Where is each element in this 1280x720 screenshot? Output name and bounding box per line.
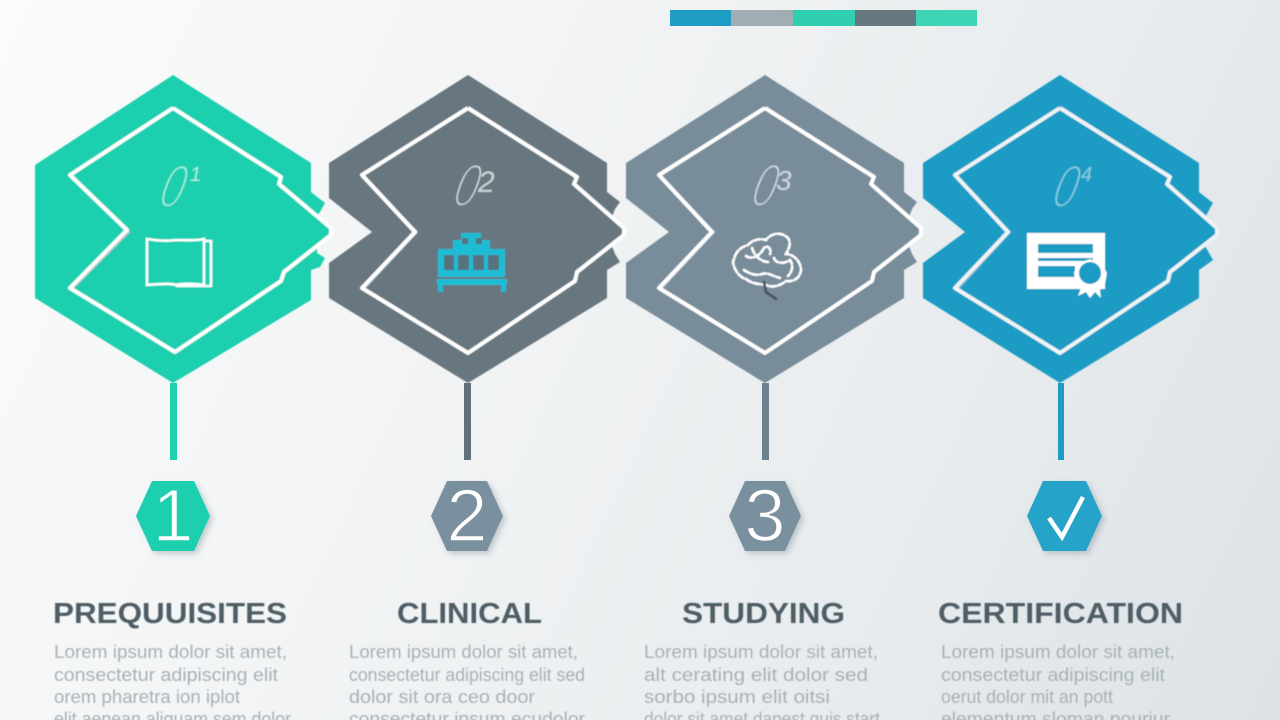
text block: clinical description — [349, 642, 585, 720]
badge: number 1 — [136, 474, 210, 557]
badge: number 2 — [431, 474, 503, 557]
badge: number 3: 3 — [744, 474, 786, 557]
badge: number 3 — [729, 474, 801, 557]
connector stem 1 — [170, 383, 177, 460]
icon: brain — [733, 234, 801, 299]
connector stem 3 — [762, 383, 769, 460]
text block: clinical description: Lorem ipsum dolor sit amet, — [349, 642, 578, 662]
text block: prerequisites description: Lorem ipsum dolor sit amet, — [54, 642, 287, 662]
step number 03: 0 — [746, 153, 786, 220]
connector stem 2 — [464, 383, 471, 460]
panel: step 2 hexagon — [329, 75, 625, 383]
panel: step 3 hexagon — [626, 75, 922, 383]
text block: clinical description: consectetur adipiscing elit sed — [349, 665, 585, 685]
heading: prerequisites: PREQUUISITES — [53, 598, 287, 630]
top colour bar — [670, 10, 977, 26]
step number 01: 0 — [154, 154, 194, 221]
panel: step 4 hexagon — [923, 75, 1218, 383]
icon: hospital bed — [437, 233, 507, 292]
text block: prerequisites description: consectetur adipiscing elit — [54, 665, 278, 685]
text block: certification description: Lorem ipsum dolor sit amet, — [941, 642, 1175, 662]
text block: clinical description: dolor sit ora ceo door — [349, 687, 535, 707]
panel: step 1 hexagon — [35, 75, 332, 383]
text block: studying description: sorbo ipsum elit oitsi — [644, 687, 830, 707]
step number 04: 0 — [1047, 154, 1087, 221]
step number 01: 1 — [190, 164, 201, 186]
connector stem 4 — [1058, 383, 1064, 460]
badge: check mark — [1027, 481, 1102, 551]
text block: certification description — [941, 642, 1175, 720]
heading: certification: CERTIFICATION — [938, 598, 1183, 630]
text block: studying description: Lorem ipsum dolor sit amet, — [644, 642, 878, 662]
badge: number 2: 2 — [446, 474, 488, 557]
text block: certification description: oerut dolor mit an pott — [941, 687, 1113, 707]
text block: studying description — [644, 642, 880, 720]
icon: open book — [147, 239, 211, 286]
heading: clinical: CLINICAL — [397, 598, 542, 630]
text block: prerequisites description: orem pharetra ion iplot — [54, 687, 240, 707]
heading: studying: STUDYING — [682, 598, 845, 630]
step number 04: 4 — [1081, 164, 1092, 186]
text block: certification description: consectetur adipiscing elit — [941, 665, 1165, 685]
text block: prerequisites description — [54, 642, 291, 720]
text block: studying description: alt cerating elit dolor sed — [644, 665, 868, 685]
icon: certificate — [1027, 233, 1107, 298]
step number 02: 0 — [448, 153, 488, 220]
step number 02: 2 — [477, 166, 495, 199]
badge: number 1: 1 — [152, 474, 194, 557]
step number 03: 3 — [776, 165, 792, 196]
